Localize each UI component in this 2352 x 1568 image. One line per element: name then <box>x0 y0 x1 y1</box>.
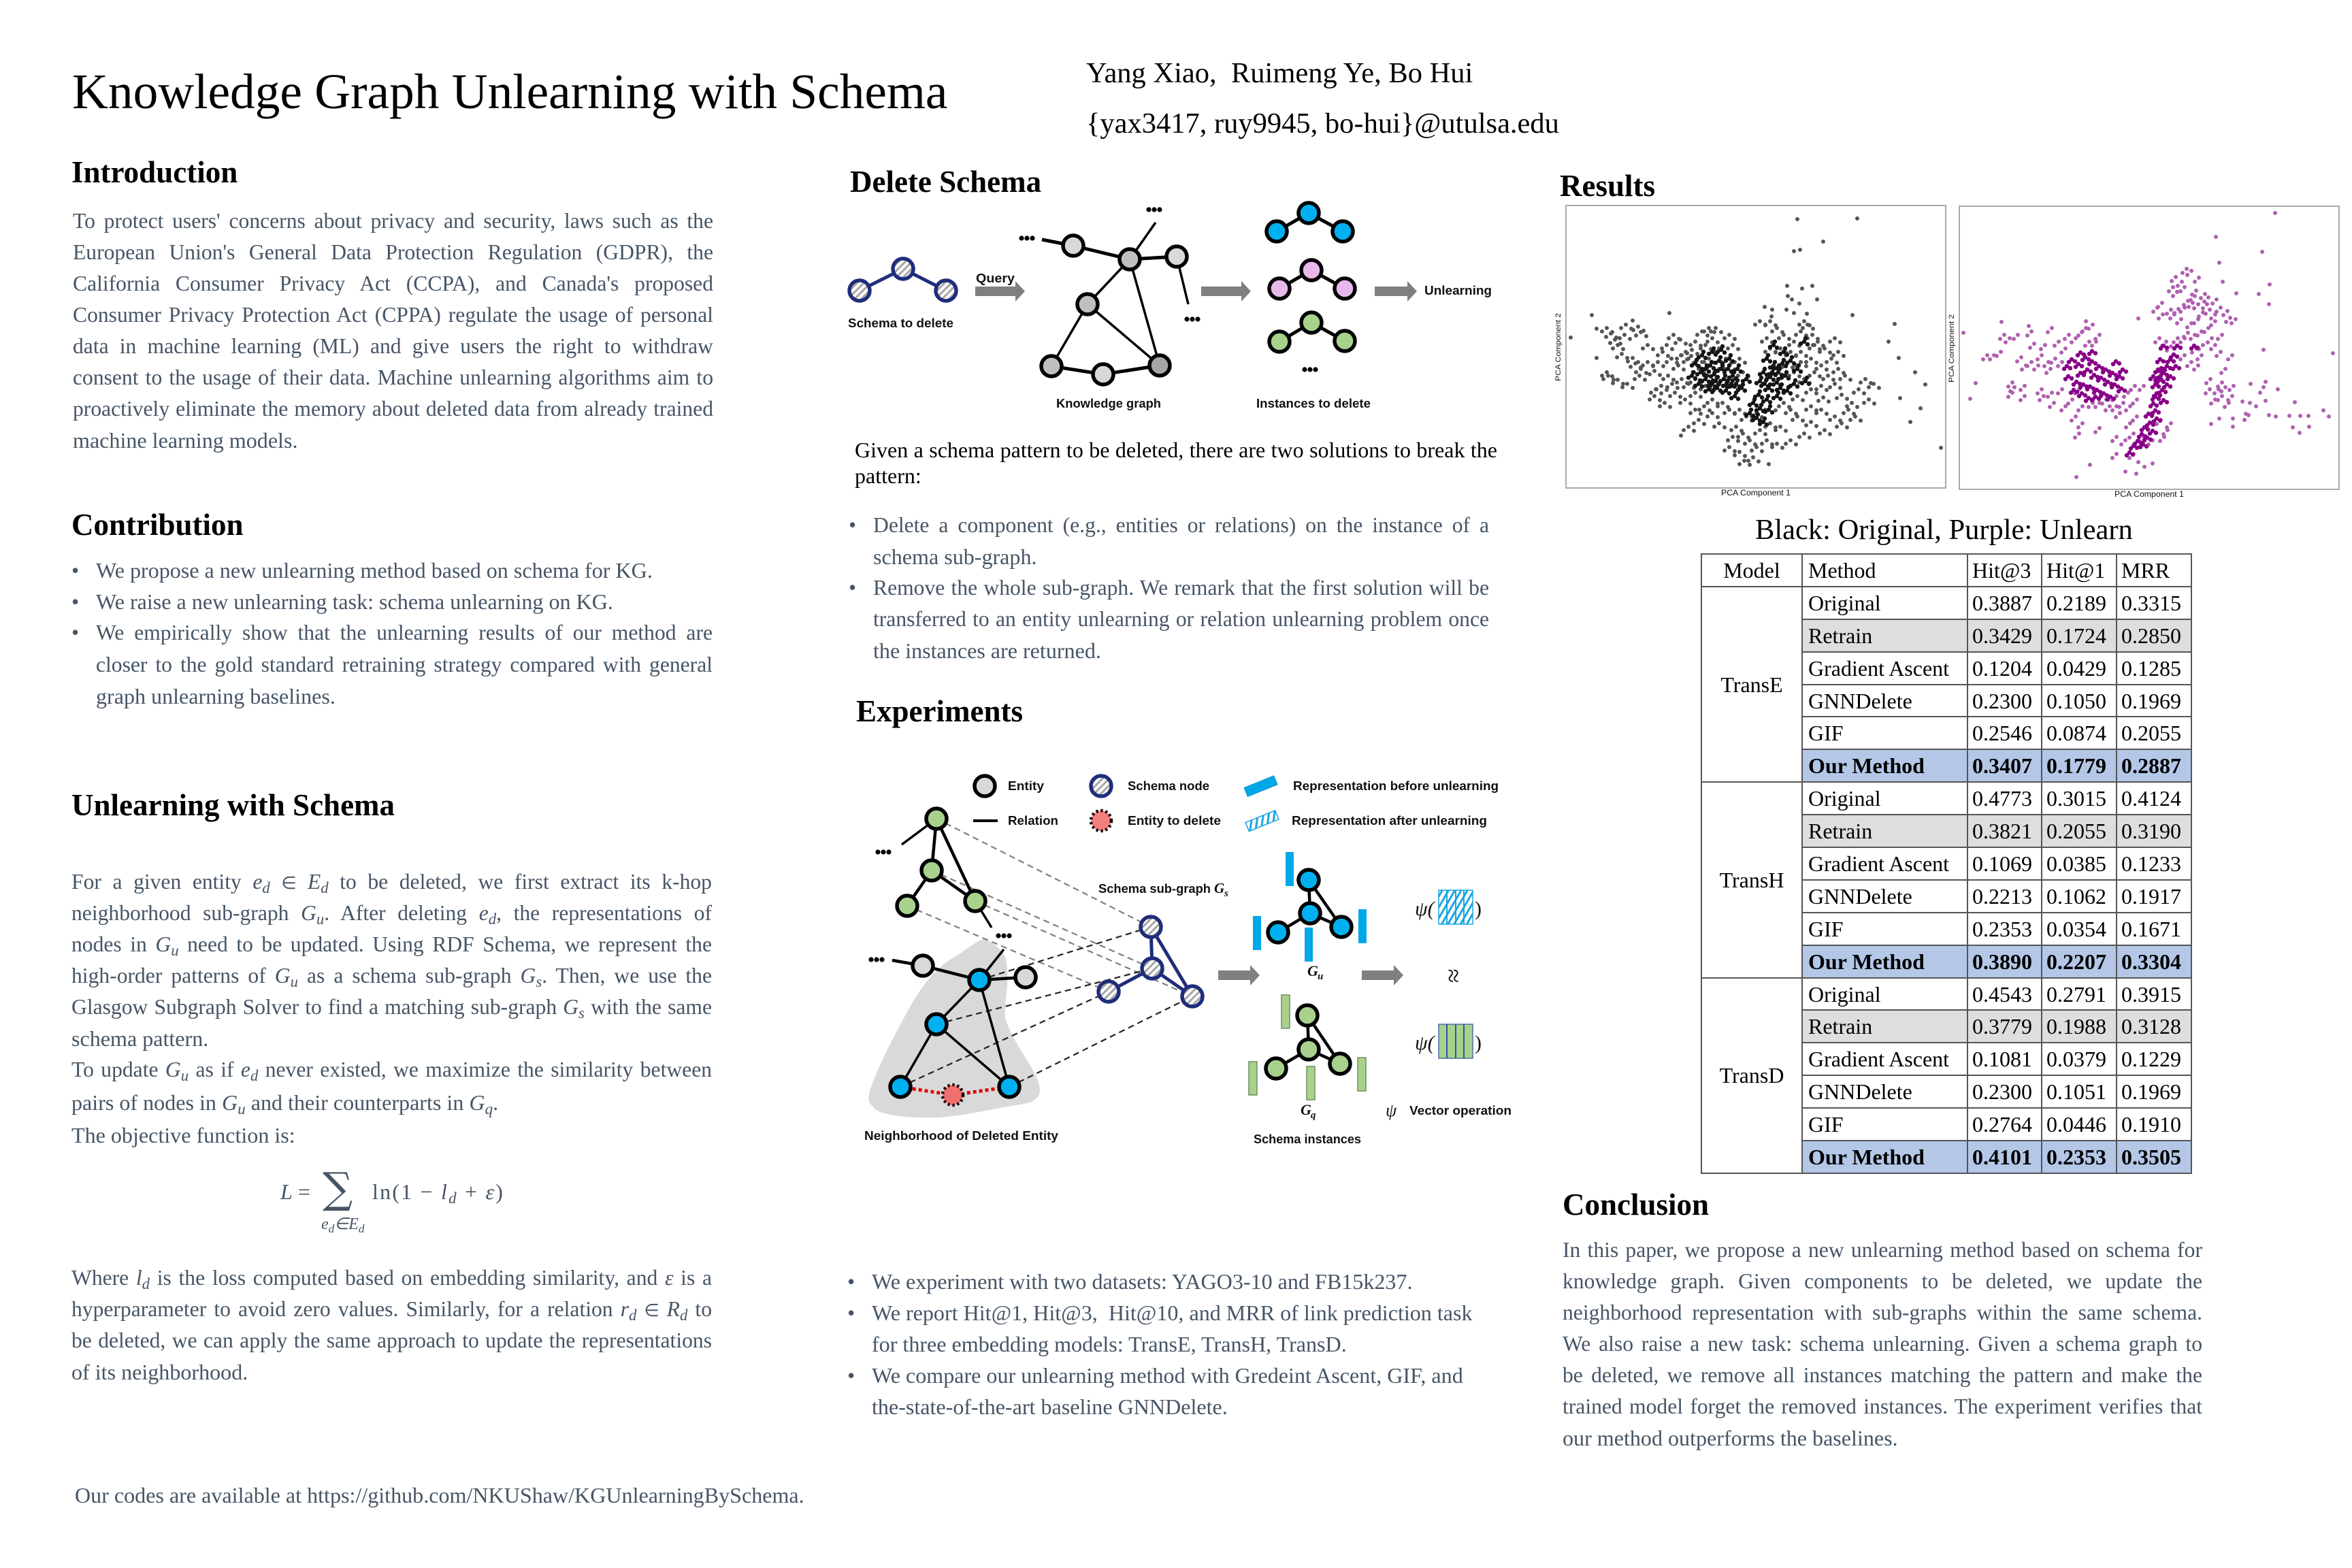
results table: Our Method <box>1808 949 1925 974</box>
bullet list: experiments: We experiment with two datasets: YAGO3-10 and FB15k237. <box>872 1269 1413 1294</box>
heading: introduction: Introduction <box>71 155 238 189</box>
results table: 0.1779 <box>2046 753 2106 778</box>
text block: method description: The objective function is: <box>71 1123 295 1147</box>
results table: GNNDelete <box>1808 689 1912 713</box>
results table: 0.3015 <box>2046 786 2106 811</box>
results table: 0.1969 <box>2121 1079 2181 1104</box>
results table: 0.1051 <box>2046 1079 2106 1104</box>
text block: conclusion: neighborhood representation with sub-graphs within the same schema. <box>1563 1301 2202 1324</box>
dashed mapping lines <box>900 819 1192 1087</box>
heading: delete schema: Delete Schema <box>850 165 1041 199</box>
text block: method description: For a given entity ed ∈ Ed to be deleted, we first extract its k-hop <box>71 870 712 896</box>
neighborhood graph: Neighborhood of Deleted Entity <box>864 1129 1058 1143</box>
authors: Yang Xiao, Ruimeng Ye, Bo Hui {yax3417, ruy9945, bo-hui}@utulsa.edu <box>1086 57 1559 140</box>
schema to delete <box>848 259 956 330</box>
axis label: PCA component 1: PCA Component 1 <box>1721 488 1791 497</box>
results table: 0.3429 <box>1972 623 2032 648</box>
bullet list: two solutions: schema sub-graph. <box>873 544 1037 569</box>
text block: method description: schema pattern. <box>71 1026 208 1051</box>
text block: method description <box>71 870 712 1147</box>
heading: contribution: Contribution <box>71 508 244 542</box>
results table: 0.3915 <box>2121 982 2181 1007</box>
text block: where clause: hyperparameter to avoid zero values. Similarly, for a relation rd ∈ Rd to <box>71 1297 712 1324</box>
caption: scatter plots: Black: Original, Purple: Unlearn <box>1755 514 2133 546</box>
arrow: unlearning <box>1375 281 1492 301</box>
results table: 0.2353 <box>2046 1145 2106 1169</box>
results table: 0.1988 <box>2046 1014 2106 1039</box>
schema sub-graph: Schema sub-graph <box>1098 882 1211 896</box>
schema instance Gu: G <box>1307 962 1318 979</box>
knowledge graph <box>1019 207 1200 410</box>
schema instance Gq: Schema instances <box>1254 1132 1361 1146</box>
outlier points <box>1571 218 1941 464</box>
results table: TransE <box>1720 672 1783 697</box>
bullet list: two solutions <box>849 513 1489 663</box>
bullet list: two solutions: Delete a component (e.g., entities or relations) on the instance of a <box>873 513 1489 537</box>
results table: Hit@1 <box>2046 558 2105 583</box>
results table: 0.1910 <box>2121 1112 2181 1137</box>
legend: Representation before unlearning <box>1293 779 1499 793</box>
text block: where clause: be deleted, we can apply the same approach to update the representations <box>71 1328 712 1352</box>
results table: Our Method <box>1808 1145 1925 1169</box>
text block: introduction: data in machine learning (ML) and give users the right to withdraw <box>73 334 713 358</box>
results table: 0.4124 <box>2121 786 2181 811</box>
text block: method description: neighborhood sub-graph Gu. After deleting ed, the representations of <box>71 901 712 928</box>
results table: MRR <box>2121 558 2170 583</box>
results table: 0.0354 <box>2046 917 2106 941</box>
bullet list: two solutions: transferred to an entity unlearning or relation unlearning problem once <box>873 607 1489 631</box>
text block: method description: Glasgow Subgraph Solver to find a matching sub-graph Gs with the same <box>71 995 712 1022</box>
text block: code link: Our codes are available at https://github.com/NKUShaw/KGUnlearningBySchema. <box>75 1483 804 1507</box>
heading: unlearning with schema: Unlearning with Schema <box>71 788 395 822</box>
results table: Original <box>1808 591 1881 615</box>
results table: Hit@3 <box>1972 558 2031 583</box>
results table: TransD <box>1720 1063 1784 1088</box>
schema sub-graph <box>1098 880 1228 1007</box>
text block: introduction: Consumer Privacy Protection Act (CPPA) regulate the usage of personal <box>73 303 713 327</box>
results table: 0.0874 <box>2046 721 2106 745</box>
dense cluster points <box>2064 346 2198 455</box>
results table: Original <box>1808 982 1881 1007</box>
results table: 0.1671 <box>2121 917 2181 941</box>
results table: 0.1724 <box>2046 623 2106 648</box>
text block: introduction: California Consumer Privacy Act (CCPA), and Canada's proposed <box>73 272 713 295</box>
results table: 0.1069 <box>1972 851 2032 876</box>
neighborhood blob <box>868 939 1040 1117</box>
results table: 0.3890 <box>1972 949 2032 974</box>
text block: introduction: proactively eliminate the memory about deleted data from already trained <box>73 397 713 421</box>
results table: 0.3315 <box>2121 591 2181 615</box>
bullet list: contribution: graph unlearning baselines. <box>96 684 336 708</box>
results table: 0.1233 <box>2121 851 2181 876</box>
schema sub-graph: G <box>1214 880 1224 896</box>
results table: 0.3407 <box>1972 753 2032 778</box>
text block: introduction: consent to the usage of their data. Machine unlearning algorithms aim to <box>73 365 713 389</box>
approximately equal sign: ≈ <box>1439 969 1467 983</box>
arrow: to instances <box>1218 965 1260 985</box>
results table: 0.2300 <box>1972 1079 2032 1104</box>
results table: 0.0385 <box>2046 851 2106 876</box>
results table: Retrain <box>1808 623 1872 648</box>
arrow: unlearning: Unlearning <box>1424 284 1492 297</box>
axis label: PCA component 1: PCA Component 1 <box>2114 489 2184 499</box>
text block: conclusion: our method outperforms the baselines. <box>1563 1426 1898 1450</box>
schema instance Gq: q <box>1311 1110 1316 1121</box>
legend: vector operation: Vector operation <box>1409 1104 1512 1117</box>
results table: Gradient Ascent <box>1808 656 1949 681</box>
arrow: to instances <box>1201 281 1251 301</box>
knowledge graph: Knowledge graph <box>1056 397 1161 410</box>
text block: introduction <box>73 209 713 453</box>
results table: Gradient Ascent <box>1808 1047 1949 1071</box>
text block: conclusion: We also raise a new task: schema unlearning. Given a schema graph to <box>1563 1332 2202 1356</box>
results table: 0.1050 <box>2046 689 2106 713</box>
results table: 0.1229 <box>2121 1047 2181 1071</box>
text block: given a schema pattern: Given a schema pattern to be deleted, there are two solutions to break the <box>855 438 1497 462</box>
heading: experiments: Experiments <box>856 694 1023 728</box>
formula: objective function: ∑ <box>323 1163 353 1213</box>
bullet list: contribution: We raise a new unlearning task: schema unlearning on KG. <box>96 589 613 614</box>
results table: TransH <box>1720 868 1784 892</box>
arrow: to vector operation <box>1362 965 1403 985</box>
vector operation after unlearning: ) <box>1475 898 1482 920</box>
text block: conclusion: knowledge graph. Given components to be deleted, we update the <box>1563 1269 2202 1293</box>
bullet list: experiments: the-state-of-the-art baseline GNNDelete. <box>872 1394 1228 1419</box>
text block: where clause <box>71 1266 712 1384</box>
text block: method description: high-order patterns of Gu as a schema sub-graph Gs. Then, we use the <box>71 964 712 990</box>
schema instance Gq: G <box>1301 1101 1311 1118</box>
formula: objective function: ln(1 − ld + ε) <box>372 1179 504 1207</box>
diagram: experiments schema unlearning <box>864 774 1512 1146</box>
arrow: query: Query <box>976 272 1015 285</box>
results table: 0.1081 <box>1972 1047 2032 1071</box>
vector operation representation <box>1415 1024 1482 1058</box>
results table: 0.3779 <box>1972 1014 2032 1039</box>
text block: method description: pairs of nodes in Gu and their counterparts in Gq. <box>71 1090 498 1117</box>
text block: method description: To update Gu as if ed never existed, we maximize the similarity between <box>71 1058 712 1084</box>
neighborhood graph <box>864 949 1058 1143</box>
text block: introduction: To protect users' concerns about privacy and security, laws such as the <box>73 209 713 233</box>
results table: 0.1917 <box>2121 884 2181 909</box>
bullet list: two solutions: Remove the whole sub-graph. We remark that the first solution will be <box>873 576 1489 600</box>
scatter plot: unlearned embeddings <box>1948 206 2340 499</box>
bullet list: contribution: closer to the gold standard retraining strategy compared with general <box>96 653 713 676</box>
text block: where clause: of its neighborhood. <box>71 1360 248 1384</box>
bullet list: experiments: We report Hit@1, Hit@3, Hit@10, and MRR of link prediction task <box>872 1301 1473 1325</box>
results table: 0.3190 <box>2121 819 2181 843</box>
bullet list: contribution <box>72 558 713 708</box>
text block: conclusion <box>1563 1238 2202 1450</box>
results table: 0.2791 <box>2046 982 2106 1007</box>
results table: Original <box>1808 786 1881 811</box>
legend: Relation <box>1008 814 1058 828</box>
bullet list: contribution: We propose a new unlearning method based on schema for KG. <box>96 558 653 583</box>
results table: 0.2353 <box>1972 917 2032 941</box>
arrow: query <box>975 272 1025 301</box>
diagram: delete schema pipeline <box>847 201 1492 410</box>
formula: objective function: L <box>280 1179 293 1204</box>
legend: Schema node <box>1128 779 1209 793</box>
results table: GIF <box>1808 721 1844 745</box>
results table: Retrain <box>1808 819 1872 843</box>
results table: 0.2850 <box>2121 623 2181 648</box>
legend: Entity <box>1008 779 1044 793</box>
schema instance Gu <box>1253 852 1367 982</box>
results table: 0.3821 <box>1972 819 2032 843</box>
results table: GIF <box>1808 1112 1844 1137</box>
legend: Representation after unlearning <box>1292 814 1487 828</box>
heading: results: Results <box>1560 169 1655 203</box>
formula: objective function: = <box>298 1179 310 1204</box>
results table: Model <box>1723 558 1780 583</box>
results table: 0.2213 <box>1972 884 2032 909</box>
results table <box>1701 553 2192 1174</box>
text block: given a schema pattern: pattern: <box>855 463 921 488</box>
legend: Entity to delete <box>1128 814 1221 828</box>
schema instance Gu: u <box>1318 971 1323 982</box>
results table: 0.3128 <box>2121 1014 2181 1039</box>
instances to delete: Instances to delete <box>1256 397 1371 410</box>
results table: 0.0429 <box>2046 656 2106 681</box>
bullet list: experiments: for three embedding models: TransE, TransH, TransD. <box>872 1332 1347 1356</box>
axis label: PCA component 2: PCA Component 2 <box>1948 314 1956 382</box>
results table: 0.4773 <box>1972 786 2032 811</box>
results table: Retrain <box>1808 1014 1872 1039</box>
bullet list: experiments: We compare our unlearning method with Gredeint Ascent, GIF, and <box>872 1363 1463 1388</box>
text block: conclusion: In this paper, we propose a new unlearning method based on schema for <box>1563 1238 2202 1262</box>
formula: objective function: ed∈Ed <box>321 1215 365 1235</box>
legend <box>973 776 1499 831</box>
results table: 0.4101 <box>1972 1145 2032 1169</box>
body points <box>1602 321 1879 465</box>
results table: GNNDelete <box>1808 1079 1912 1104</box>
results table: 0.1969 <box>2121 689 2181 713</box>
results table: 0.2887 <box>2121 753 2181 778</box>
results table: 0.3505 <box>2121 1145 2181 1169</box>
text block: where clause: Where ld is the loss computed based on embedding similarity, and ε is a <box>71 1266 712 1292</box>
axis label: PCA component 2: PCA Component 2 <box>1554 313 1563 381</box>
results table: GIF <box>1808 917 1844 941</box>
scatter plot: original embeddings <box>1554 205 1946 497</box>
bullet list: two solutions: the instances are returned. <box>873 638 1101 663</box>
schema instance Gq <box>1249 995 1366 1146</box>
results table: 0.1285 <box>2121 656 2181 681</box>
results table: 0.3304 <box>2121 949 2181 974</box>
results table: 0.1204 <box>1972 656 2032 681</box>
title: Knowledge Graph Unlearning with Schema <box>72 64 947 119</box>
legend: vector operation <box>1386 1100 1512 1120</box>
results table: 0.2055 <box>2046 819 2106 843</box>
results table: 0.3887 <box>1972 591 2032 615</box>
vector operation representation: ψ( <box>1415 1032 1436 1054</box>
green upper graph <box>875 808 1012 938</box>
results table: 0.0379 <box>2046 1047 2106 1071</box>
results table: 0.2546 <box>1972 721 2032 745</box>
results table: 0.1062 <box>2046 884 2106 909</box>
bullet list: experiments <box>848 1269 1473 1419</box>
text block: introduction: European Union's General Data Protection Regulation (GDPR), the <box>73 240 713 264</box>
body points <box>1983 269 2236 458</box>
schema to delete: Schema to delete <box>848 316 953 330</box>
vector operation representation: ) <box>1475 1032 1482 1054</box>
text block: method description: nodes in Gu need to be updated. Using RDF Schema, we represent the <box>71 932 712 959</box>
text block: conclusion: be deleted, we remove all instances matching the pattern and make the <box>1563 1363 2202 1387</box>
text block: introduction: machine learning models. <box>73 428 297 453</box>
dense cluster points <box>1688 338 1809 425</box>
results table: 0.2055 <box>2121 721 2181 745</box>
results table: GNNDelete <box>1808 884 1912 909</box>
heading: conclusion: Conclusion <box>1563 1188 1709 1222</box>
outlier points <box>1963 213 2333 477</box>
results table: Gradient Ascent <box>1808 851 1949 876</box>
legend: vector operation: ψ <box>1386 1100 1397 1120</box>
results table: Method <box>1808 558 1876 583</box>
vector operation after unlearning <box>1415 890 1482 924</box>
text block: conclusion: trained model forget the removed instances. The experiment verifies that <box>1563 1394 2202 1418</box>
results table: 0.2207 <box>2046 949 2106 974</box>
results table: 0.0446 <box>2046 1112 2106 1137</box>
schema sub-graph: s <box>1224 888 1228 899</box>
vector operation after unlearning: ψ( <box>1415 898 1436 920</box>
results table: 0.2764 <box>1972 1112 2032 1137</box>
results table: 0.4543 <box>1972 982 2032 1007</box>
instances to delete <box>1256 203 1371 410</box>
results table: 0.2300 <box>1972 689 2032 713</box>
bullet list: contribution: We empirically show that the unlearning results of our method are <box>96 621 713 644</box>
results table: Our Method <box>1808 753 1925 778</box>
formula: objective function <box>280 1163 504 1235</box>
text block: given a schema pattern <box>855 438 1497 488</box>
results table: 0.2189 <box>2046 591 2106 615</box>
